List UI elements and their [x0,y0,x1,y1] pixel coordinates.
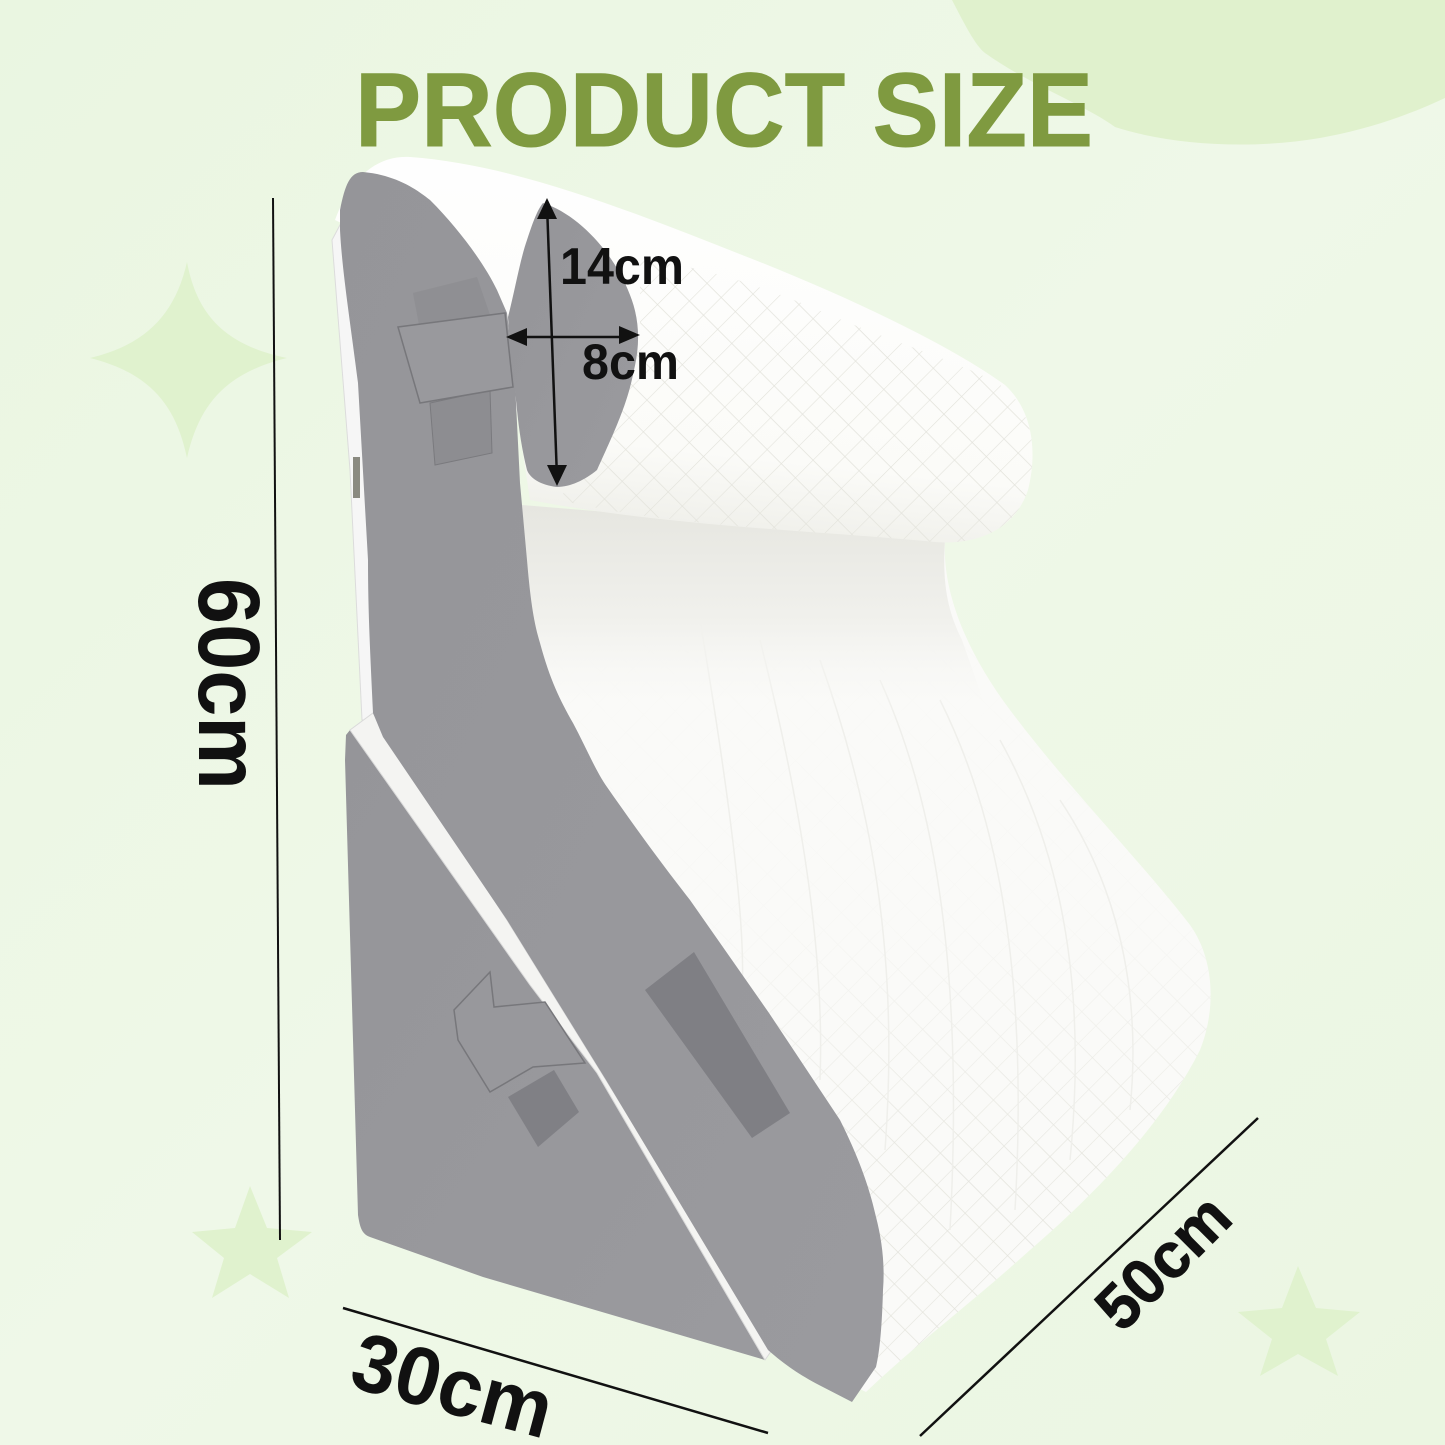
grey side panel [340,172,884,1402]
dimension: height 60cm [180,198,280,1240]
roll end cap [508,203,638,487]
zipper edge upper [332,225,382,720]
dimension: width 50cm [920,1118,1258,1436]
dimension: roll width 8cm: 8cm [582,334,679,390]
body vertical stitching [700,620,1133,1230]
background blob top right [952,0,1445,145]
dimension: roll height 14cm: 14cm [560,238,684,296]
icon: star lower left [192,1186,312,1298]
white wedge seam [350,713,772,1360]
velcro strap lower [454,972,585,1092]
pillow [332,157,1211,1402]
dimension: roll width 8cm [506,326,679,390]
icon: four-point star left [90,262,287,458]
body quilting [758,980,1210,1378]
roll quilting [560,260,1033,542]
velcro patch lower wedge [508,1070,579,1147]
zipper pull [353,457,360,498]
dimension: height 60cm: 60cm [180,578,277,790]
main wedge body [520,510,1211,1392]
velcro tab upper [413,277,490,330]
icon: star lower right [1238,1266,1360,1376]
neck shading [522,505,990,720]
dimension: roll height 14cm [537,198,684,486]
velcro strap upper [398,313,513,403]
lower wedge side [345,730,765,1360]
dimension: width 50cm: 50cm [1081,1180,1245,1344]
velcro patch lower panel [645,952,790,1138]
dimension: depth 30cm [342,1308,768,1445]
title: PRODUCT SIZE [355,52,1093,169]
velcro patch upper [430,390,492,465]
neck roll [335,157,1033,542]
